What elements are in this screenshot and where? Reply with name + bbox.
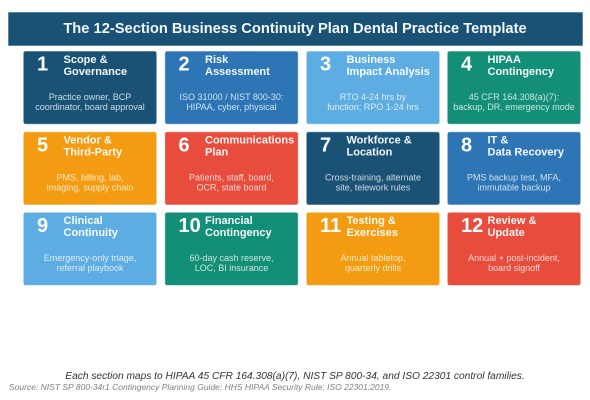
card 10: Financial Contingency: Contingency — [205, 227, 272, 239]
card 3: Business Impact Analysis: Business — [346, 54, 395, 66]
card 9: Clinical Continuity: Continuity — [64, 227, 119, 239]
card 3: Business Impact Analysis: Impact Analysis — [346, 66, 430, 78]
footnote: Each section maps to HIPAA 45 CFR 164.308(a)(7), NIST SP 800-34, and ISO 22301 control families. — [65, 371, 525, 382]
card 7: Workforce & Location: Workforce & — [346, 134, 412, 146]
card 5: Vendor & Third-Party: Vendor & — [64, 134, 112, 146]
card 10: Financial Contingency — [165, 212, 298, 285]
card 12: Review & Update: Review & — [488, 215, 536, 227]
card 8: IT & Data Recovery: IT & — [488, 134, 508, 146]
card 12: Review & Update — [448, 212, 580, 285]
card 4: HIPAA Contingency — [448, 51, 580, 124]
card 8: IT & Data Recovery: 8 — [461, 134, 472, 156]
card 8: IT & Data Recovery: immutable backup — [477, 183, 551, 193]
card 5: Vendor & Third-Party: 5 — [37, 134, 48, 156]
card 2: Risk Assessment: Risk — [205, 54, 229, 66]
title banner: The 12-Section Business Continuity Plan Dental Practice Template — [63, 21, 527, 37]
card 6: Communications Plan: OCR, state board — [196, 183, 267, 193]
card 2: Risk Assessment: 2 — [178, 54, 190, 76]
card 10: Financial Contingency: Financial — [205, 215, 253, 227]
card 8: IT & Data Recovery: Data Recovery — [488, 146, 565, 158]
card 4: HIPAA Contingency: Contingency — [488, 66, 555, 78]
card 3: Business Impact Analysis: function; RPO 1-24 hrs — [327, 102, 419, 112]
card 10: Financial Contingency: 60-day cash reserve, — [189, 253, 274, 263]
card 8: IT & Data Recovery: PMS backup test, MFA, — [467, 173, 561, 183]
card 9: Clinical Continuity — [24, 212, 156, 285]
card 1: Scope & Governance: Scope & — [64, 54, 108, 66]
card 4: HIPAA Contingency: 4 — [461, 54, 473, 76]
card 5: Vendor & Third-Party — [24, 132, 156, 205]
card 10: Financial Contingency: LOC, BI insurance — [195, 263, 268, 273]
card 3: Business Impact Analysis: 3 — [320, 54, 331, 76]
card 9: Clinical Continuity: Clinical — [64, 215, 103, 227]
card 2: Risk Assessment: HIPAA, cyber, physical — [186, 102, 277, 112]
card 1: Scope & Governance: 1 — [37, 54, 48, 76]
card 11: Testing & Exercises: quarterly drills — [345, 263, 402, 273]
card 11: Testing & Exercises: Annual tabletop, — [340, 253, 406, 263]
card 5: Vendor & Third-Party: Third-Party — [64, 146, 123, 158]
card 1: Scope & Governance: coordinator, board approval — [35, 102, 145, 112]
card 7: Workforce & Location: Location — [346, 146, 393, 158]
card 11: Testing & Exercises: 11 — [320, 215, 341, 237]
card 6: Communications Plan — [165, 132, 298, 205]
card 9: Clinical Continuity: referral playbook — [56, 263, 124, 273]
card 5: Vendor & Third-Party: PMS, billing, lab, — [56, 173, 124, 183]
card 4: HIPAA Contingency: backup, DR, emergency mode — [453, 102, 575, 112]
card 2: Risk Assessment — [165, 51, 298, 124]
card 1: Scope & Governance — [24, 51, 156, 124]
card 11: Testing & Exercises — [306, 212, 440, 285]
card 2: Risk Assessment: Assessment — [205, 66, 270, 78]
card 8: IT & Data Recovery — [448, 132, 580, 205]
card 7: Workforce & Location: Cross-training, alternate — [325, 173, 421, 183]
card 3: Business Impact Analysis: RTO 4-24 hrs by — [340, 92, 407, 102]
card 1: Scope & Governance: Governance — [64, 66, 127, 78]
card 9: Clinical Continuity: 9 — [37, 215, 48, 237]
card 4: HIPAA Contingency: 45 CFR 164.308(a)(7): — [469, 92, 559, 102]
card 1: Scope & Governance: Practice owner, BCP — [49, 92, 131, 102]
card 12: Review & Update: Annual + post-incident, — [468, 253, 560, 263]
title banner — [8, 12, 583, 46]
card 7: Workforce & Location — [306, 132, 440, 205]
card 11: Testing & Exercises: Exercises — [346, 227, 398, 239]
card 7: Workforce & Location: 7 — [320, 134, 331, 156]
card 2: Risk Assessment: ISO 31000 / NIST 800-30: — [180, 92, 283, 102]
card 9: Clinical Continuity: Emergency-only triage, — [44, 253, 136, 263]
card 12: Review & Update: 12 — [461, 215, 483, 237]
card 12: Review & Update: board signoff — [488, 263, 540, 273]
card 4: HIPAA Contingency: HIPAA — [488, 54, 521, 66]
card 11: Testing & Exercises: Testing & — [346, 215, 396, 227]
card 6: Communications Plan: Communications — [205, 134, 294, 146]
card 6: Communications Plan: Plan — [205, 146, 229, 158]
card 12: Review & Update: Update — [488, 227, 525, 239]
card 3: Business Impact Analysis — [306, 51, 440, 124]
card 6: Communications Plan: 6 — [178, 134, 190, 156]
card 10: Financial Contingency: 10 — [178, 215, 201, 237]
card 7: Workforce & Location: site, telework rules — [336, 183, 411, 193]
card 5: Vendor & Third-Party: imaging, supply chain — [47, 183, 133, 193]
card 6: Communications Plan: Patients, staff, board, — [189, 173, 274, 183]
source line: Source: NIST SP 800-34r1 Contingency Planning Guide; HHS HIPAA Security Rule; ISO 22301:2019. — [9, 382, 391, 392]
